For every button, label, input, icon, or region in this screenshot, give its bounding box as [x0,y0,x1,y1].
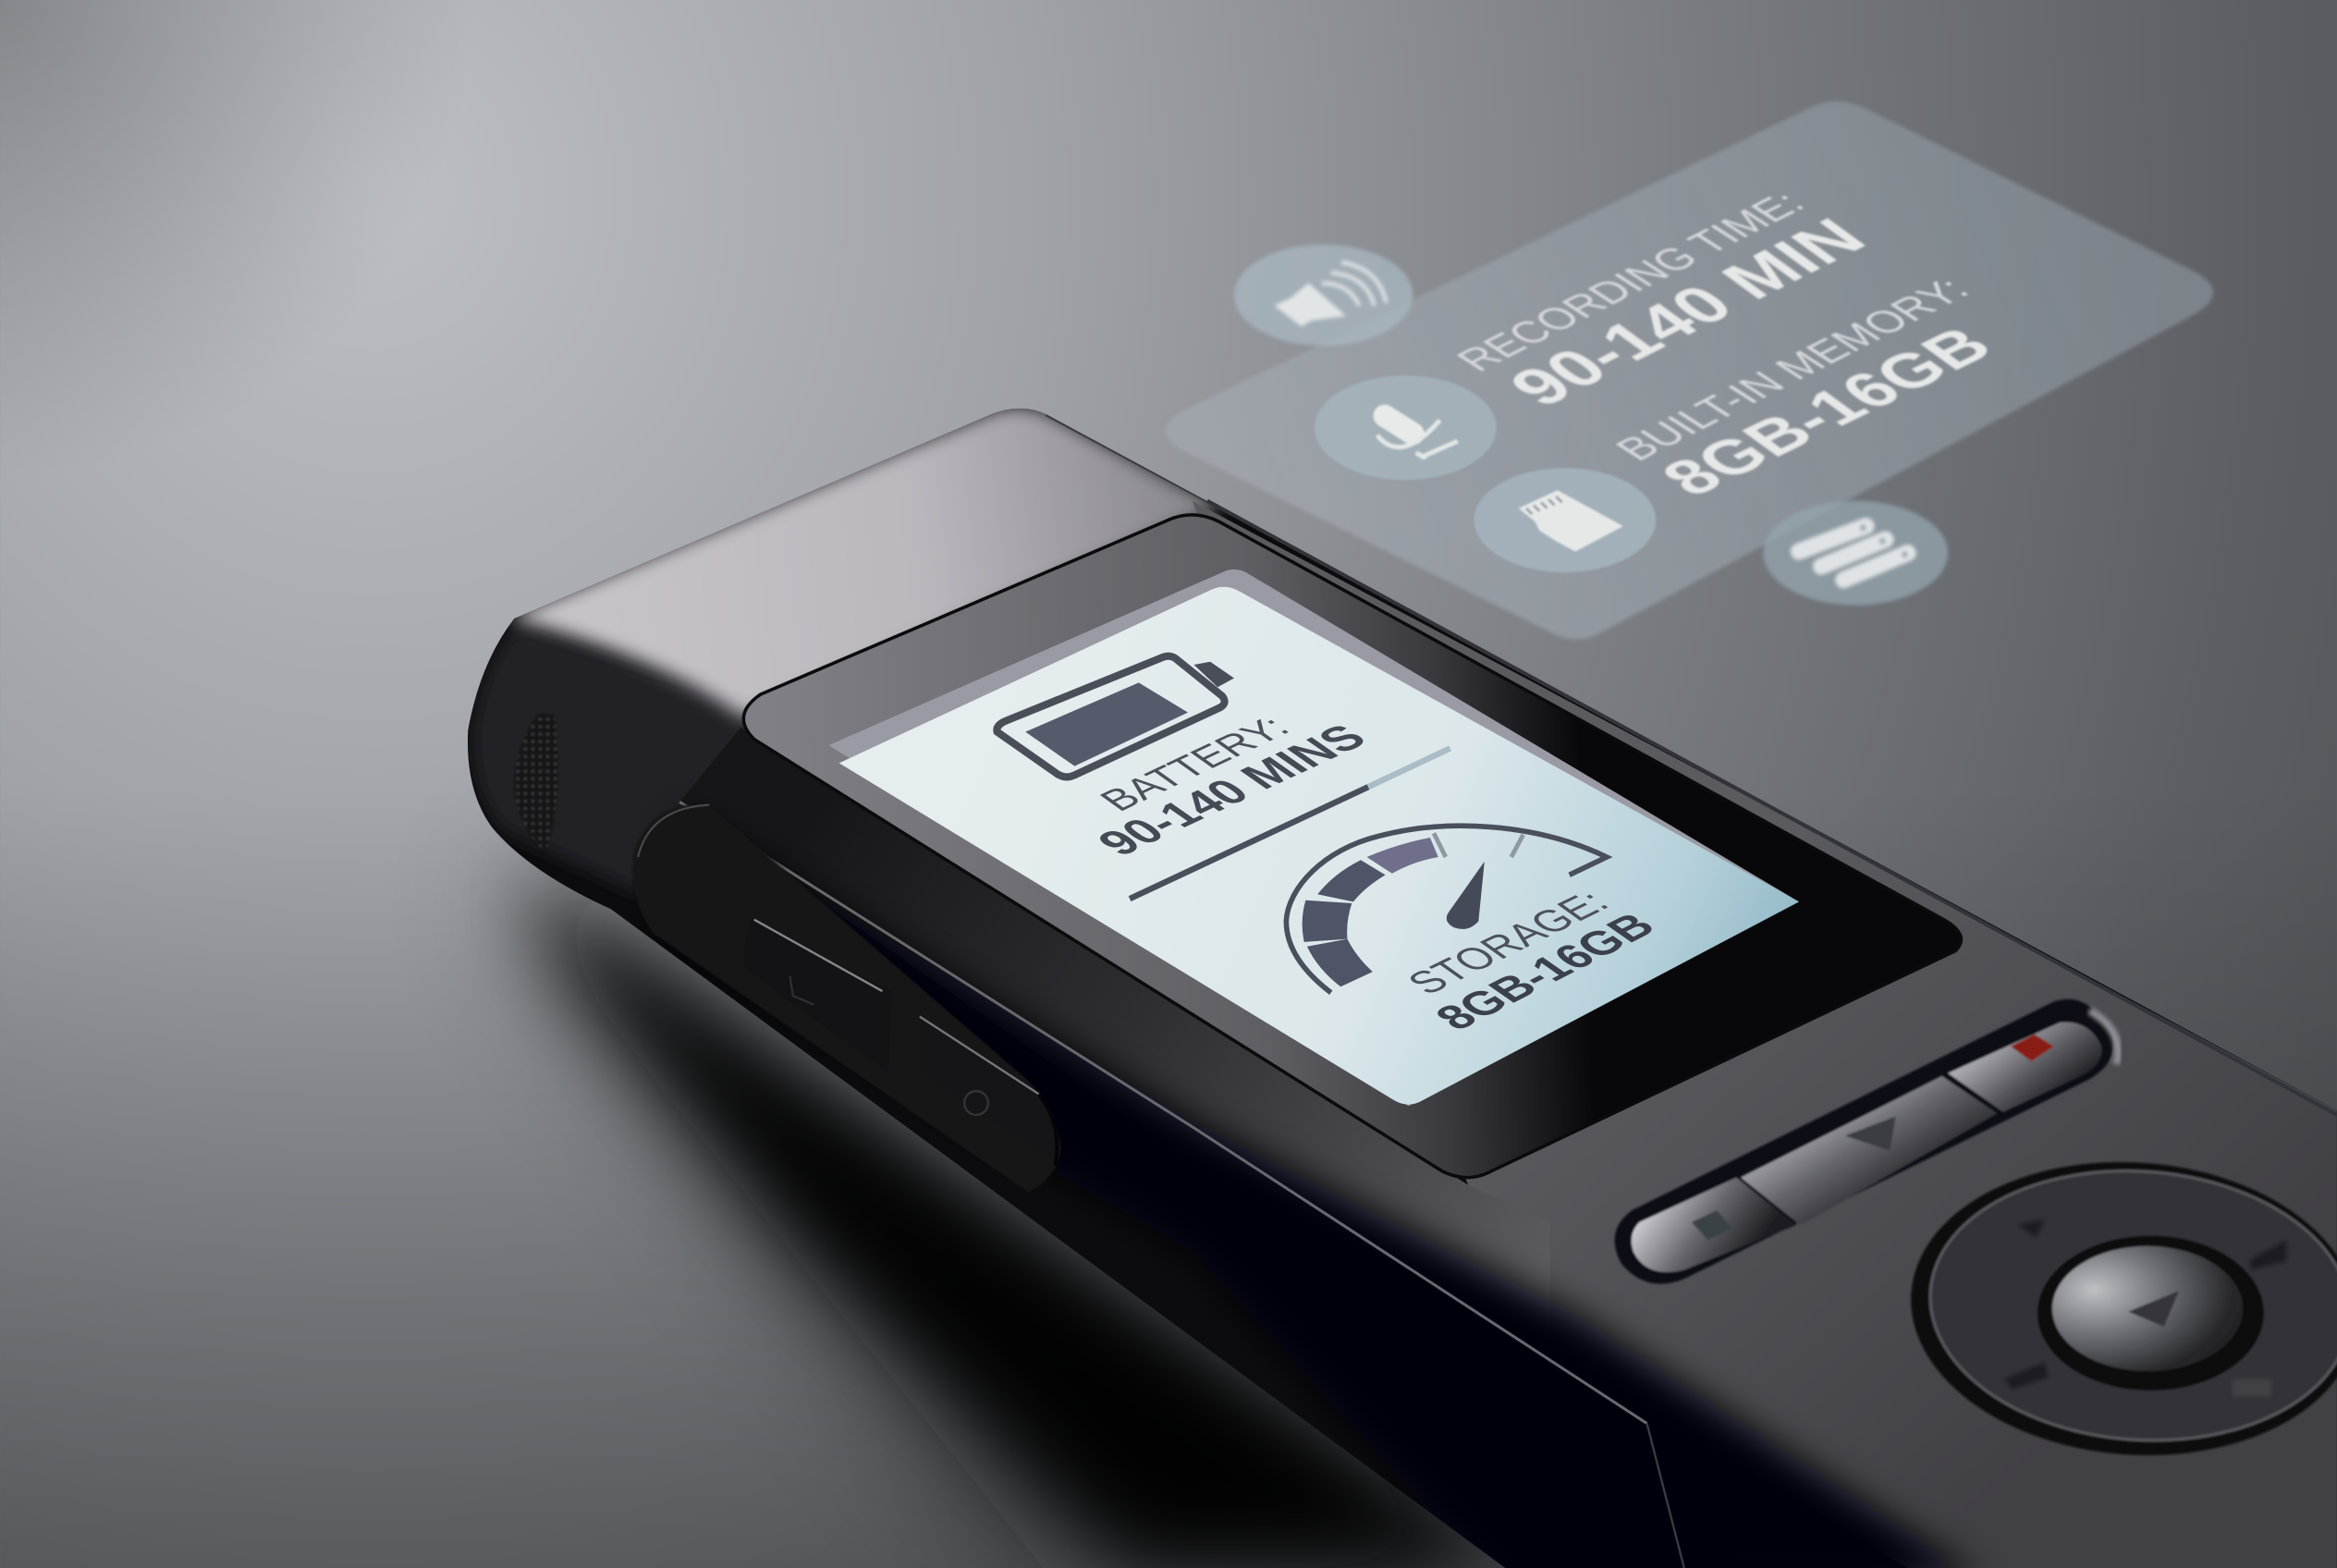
icon: storage gauge [1286,826,1607,993]
side button recess [632,804,1061,1193]
top right edge line [1207,501,2337,1115]
cap rear hard edge [1046,414,1207,501]
navigation dial [1901,1147,2337,1470]
storage label: STORAGE: [1398,885,1619,1001]
record button [1948,1023,2102,1112]
icon: memory card [1474,468,1656,572]
icon: speaker [1234,244,1413,346]
voice recorder device [417,373,2337,1568]
dark side body [417,373,2337,1568]
icon: microphone [1315,375,1497,480]
upper face of body [1193,501,2337,1568]
battery label: BATTERY: [1090,710,1299,817]
groove rim highlight [2089,1011,2118,1064]
stop button [1632,1178,1796,1272]
device body with clip [417,373,2337,1568]
dial direction marks [2004,1219,2286,1397]
floating info panel [1166,102,2213,640]
centre knob [2037,1235,2264,1390]
gauge needle [1447,862,1485,929]
black falloff toward side [655,814,1982,1568]
panel background [1166,102,2213,640]
recess highlight [638,805,709,857]
volume button left [744,920,891,1073]
icon: battery [997,656,1234,777]
built-in memory text: 8GB-16GB [1646,316,2007,506]
button groove [1615,999,2113,1284]
screen bezel [743,515,1961,1178]
recording time text: 90-140 MIN [1493,207,1881,417]
built-in memory text: BUILT-IN MEMORY: [1605,271,1979,467]
recording time text: RECORDING TIME: [1447,186,1815,378]
storage label: 8GB-16GB [1425,906,1667,1037]
device shadow on desk [507,879,1520,1568]
icon: storage stack [1763,501,1948,606]
faint lower side edge [1647,1424,1684,1568]
play button [1741,1076,1997,1225]
side highlight line [679,802,1647,1424]
face strip left of screen [680,728,1487,1292]
speaker grille [514,713,557,852]
end cap lit surface [514,406,1222,718]
divider line [1130,748,1450,899]
battery label: 90-140 MINS [1086,717,1377,863]
red record indicator [2011,1035,2054,1061]
LCD outer frame [828,570,1799,1106]
LCD display [839,587,1799,1105]
volume button right [917,1016,1057,1166]
control buttons [1615,999,2118,1284]
rear end shading [468,627,745,895]
